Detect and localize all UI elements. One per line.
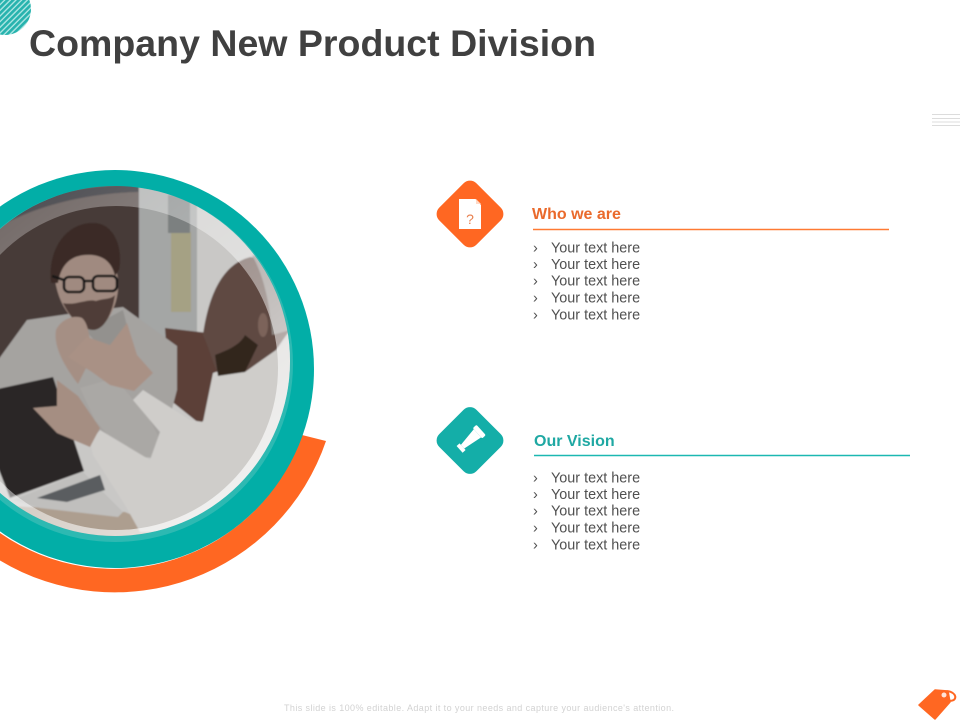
icon: price tag [919, 690, 957, 719]
front hand [33, 380, 100, 447]
bullet list: Your text here [551, 538, 640, 554]
laptop base [13, 472, 123, 517]
photo of two businessmen in a meeting [0, 186, 290, 536]
table surface [18, 506, 152, 536]
bullet list: Your text here [551, 470, 640, 486]
second man head [203, 257, 290, 374]
panel: our vision [533, 433, 910, 554]
bullet list: Your text here [551, 308, 640, 324]
bullet list: › [533, 504, 538, 520]
orange arc [0, 435, 326, 592]
man one beard [63, 295, 115, 330]
window and shelf [139, 180, 197, 340]
bullet list: Your text here [551, 520, 640, 536]
man one sleeve [130, 448, 152, 458]
corner decoration: striped circle [0, 0, 31, 35]
decorative lines icon [932, 114, 960, 126]
lighter teal inner edge [0, 186, 293, 542]
bullet list: › [533, 308, 538, 324]
gesturing hand [86, 324, 153, 391]
man one neck and face [54, 254, 119, 318]
bullet list: › [533, 487, 538, 503]
footer note: This slide is 100% editable. Adapt it to your needs and capture your audience's attention. [284, 703, 674, 713]
second man sweater [94, 370, 236, 532]
panel: who we are [532, 206, 889, 324]
bullet list: › [533, 520, 538, 536]
bullet list: Your text here [551, 290, 640, 306]
raised fist [56, 316, 90, 384]
bullet list: Your text here [551, 504, 640, 520]
icon: question document in orange diamond: ? [466, 211, 474, 227]
glass veil ring around photo [0, 186, 290, 536]
heading: our vision: Our Vision [534, 433, 615, 450]
bullet list: Your text here [551, 240, 640, 256]
laptop screen [0, 377, 84, 498]
heading underline [534, 454, 910, 456]
dark wall [0, 186, 140, 359]
bullet list: › [533, 274, 538, 290]
icon: telescope in teal diamond [433, 403, 507, 478]
bullet list [533, 240, 640, 324]
man one hair [51, 223, 120, 283]
title: Company New Product Division [29, 22, 596, 64]
circular photo graphic [0, 170, 326, 592]
bullet list: › [533, 290, 538, 306]
icon: question document in orange diamond [433, 177, 507, 251]
bullet list: Your text here [551, 257, 640, 273]
heading: who we are: Who we are [532, 206, 621, 223]
brown table behind [164, 328, 218, 422]
bullet list: Your text here [551, 487, 640, 503]
bullet list [533, 470, 640, 554]
glasses [52, 276, 117, 292]
man one suit [0, 306, 178, 436]
bullet list: Your text here [551, 274, 640, 290]
bullet list: › [533, 257, 538, 273]
bullet list: › [533, 538, 538, 554]
teal ring [0, 170, 314, 568]
bullet list: › [533, 470, 538, 486]
heading underline [533, 228, 889, 230]
bullet list: › [533, 240, 538, 256]
